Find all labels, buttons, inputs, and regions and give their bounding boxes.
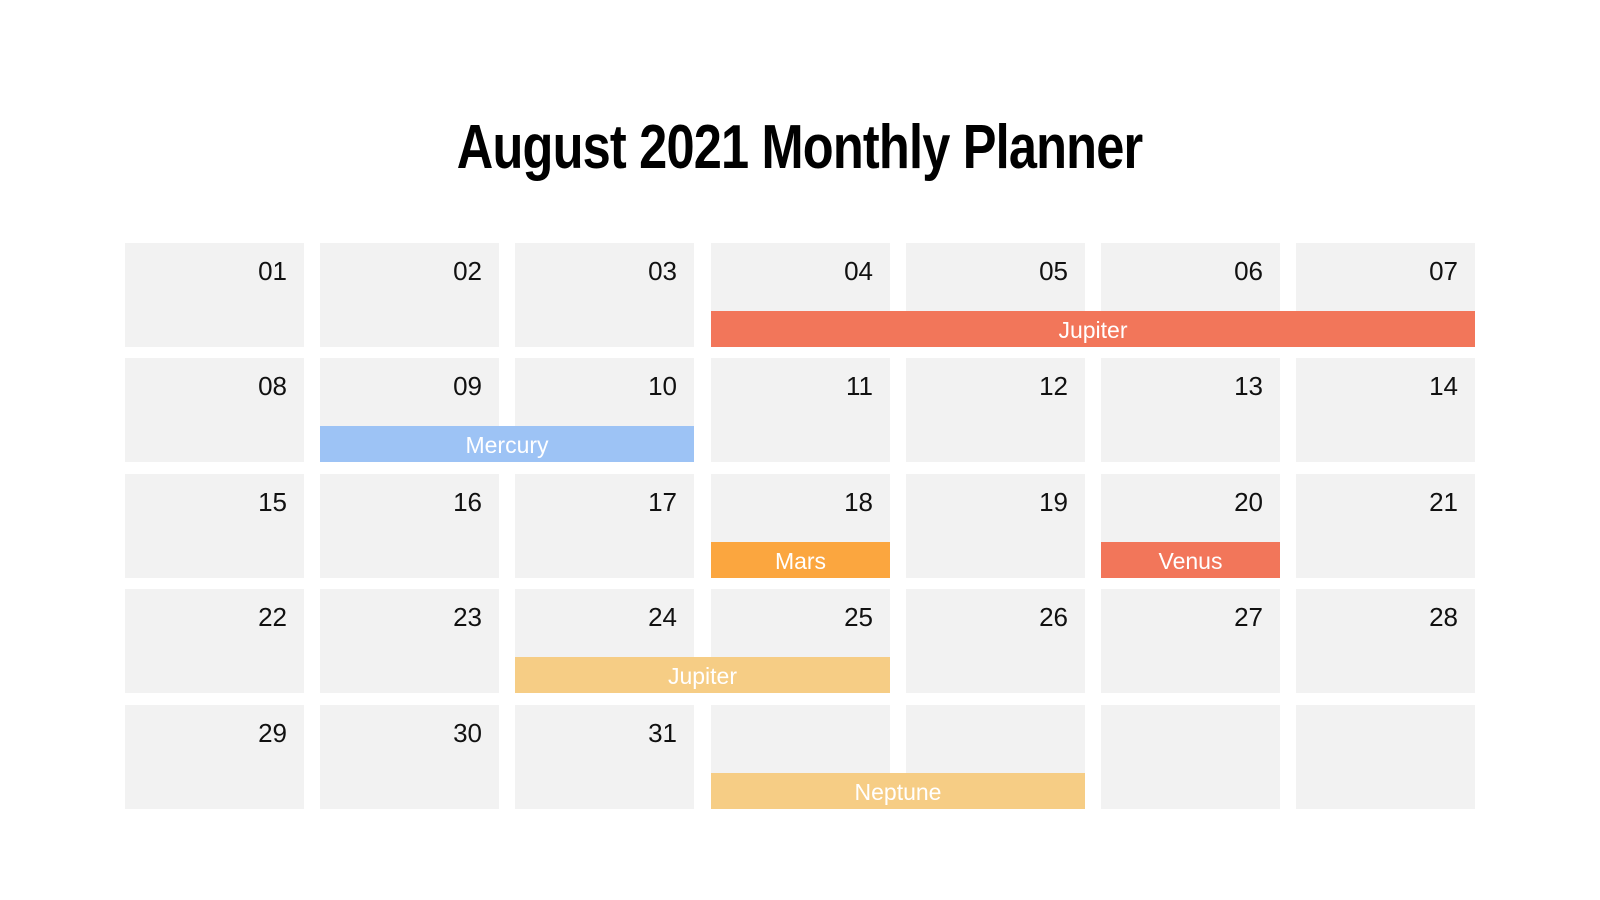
event bar: Jupiter 2 xyxy=(515,657,890,693)
calendar grid: 21 xyxy=(1429,487,1458,517)
calendar grid: 06 xyxy=(1234,256,1263,286)
calendar grid: 22 xyxy=(258,602,287,632)
event bar: Neptune: Neptune xyxy=(855,779,941,805)
calendar grid: 12 xyxy=(1039,371,1068,401)
event bar: Mercury: Mercury xyxy=(465,432,549,458)
calendar grid: 07 xyxy=(1429,256,1458,286)
event bar: Neptune xyxy=(711,773,1085,809)
calendar grid: 05 xyxy=(1039,256,1068,286)
calendar grid: 26 xyxy=(1039,602,1068,632)
calendar grid: 17 xyxy=(648,487,677,517)
event bar: Jupiter xyxy=(711,311,1475,347)
calendar grid: 04 xyxy=(844,256,873,286)
calendar grid: 03 xyxy=(648,256,677,286)
calendar grid: 18 xyxy=(844,487,873,517)
event bar: Jupiter: Jupiter xyxy=(1058,317,1128,343)
event bar: Venus: Venus xyxy=(1159,548,1222,574)
calendar grid: 24 xyxy=(648,602,677,632)
calendar grid: 16 xyxy=(453,487,482,517)
calendar grid: 27 xyxy=(1234,602,1263,632)
calendar grid: 31 xyxy=(648,718,677,748)
calendar grid: 10 xyxy=(648,371,677,401)
event bar: Venus xyxy=(1101,542,1280,578)
calendar grid: 30 xyxy=(453,718,482,748)
calendar grid: 29 xyxy=(258,718,287,748)
calendar grid: 28 xyxy=(1429,602,1458,632)
event bar: Mars xyxy=(711,542,890,578)
calendar grid: 19 xyxy=(1039,487,1068,517)
event bar: Mars: Mars xyxy=(775,548,826,574)
calendar grid: 02 xyxy=(453,256,482,286)
calendar grid: 08 xyxy=(258,371,287,401)
calendar grid: 25 xyxy=(844,602,873,632)
event bar: Mercury xyxy=(320,426,694,462)
calendar grid: 09 xyxy=(453,371,482,401)
event bar: Jupiter 2: Jupiter xyxy=(668,663,737,689)
title: August 2021 Monthly Planner xyxy=(457,113,1143,182)
calendar grid: 13 xyxy=(1234,371,1263,401)
calendar grid: 23 xyxy=(453,602,482,632)
calendar grid: 11 xyxy=(846,371,873,401)
calendar grid: 01 xyxy=(258,256,287,286)
calendar grid: 15 xyxy=(258,487,287,517)
calendar grid: 14 xyxy=(1429,371,1458,401)
calendar grid: 20 xyxy=(1234,487,1263,517)
